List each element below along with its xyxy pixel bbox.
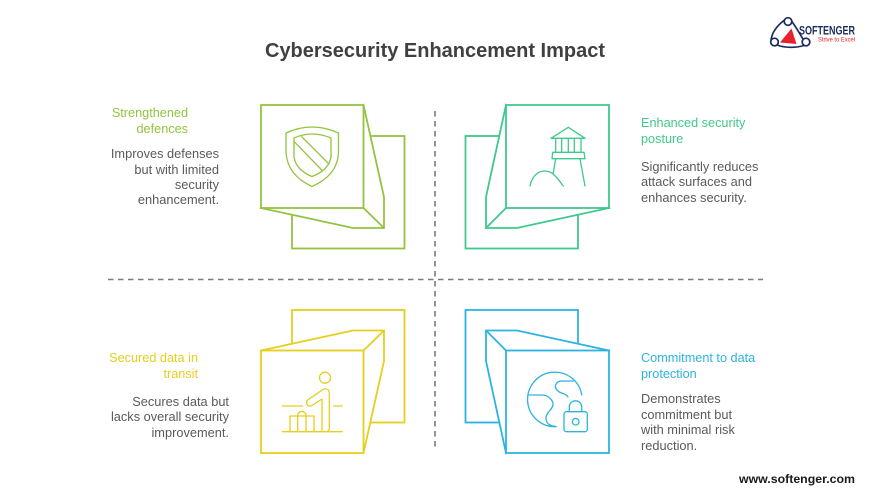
icon: shield (286, 127, 338, 186)
text block: strengthened defences: security (175, 177, 220, 192)
horizontal dashed divider (108, 278, 763, 280)
text block: enhanced security posture: enhances security. (641, 190, 747, 205)
text block: commitment to data protection: commitment but (641, 407, 732, 422)
text block: commitment to data protection: Demonstrates (641, 391, 721, 406)
text block: secured data in transit: Secures data but (132, 394, 229, 409)
text block: strengthened defences: defences (136, 122, 188, 136)
text block: secured data in transit: transit (163, 367, 198, 381)
text block: secured data in transit (109, 351, 230, 440)
text block: commitment to data protection: with minimal risk (640, 422, 735, 437)
text block: commitment to data protection: reduction. (641, 438, 697, 453)
text block: strengthened defences: Improves defenses (111, 146, 219, 161)
text block: commitment to data protection (640, 351, 756, 453)
text block: commitment to data protection: Commitment to data (641, 351, 756, 365)
text block: commitment to data protection: protection (641, 367, 697, 381)
vertical dashed divider (434, 111, 436, 450)
text block: enhanced security posture: Enhanced security (641, 116, 746, 130)
text block: strengthened defences: Strengthened (112, 106, 188, 120)
text block: strengthened defences (111, 106, 220, 207)
panel: secured data in transit graphic (261, 310, 404, 453)
logo: Softenger: Strive to Excel (818, 37, 855, 44)
website url: www.softenger.com (738, 472, 855, 486)
text block: enhanced security posture: attack surfaces and (641, 174, 752, 189)
text block: enhanced security posture (641, 116, 758, 205)
text block: enhanced security posture: posture (641, 132, 683, 146)
text block: enhanced security posture: Significantly reduces (641, 159, 758, 174)
logo: Softenger: SOFTENGER (799, 24, 855, 38)
text block: secured data in transit: improvement. (151, 425, 229, 440)
logo: Softenger (771, 18, 855, 47)
panel: strengthened defences graphic (261, 105, 404, 248)
text block: strengthened defences: enhancement. (138, 192, 219, 207)
panel: enhanced security posture graphic (466, 105, 609, 248)
icon: traveller with luggage (282, 372, 342, 432)
title: Cybersecurity Enhancement Impact (265, 39, 605, 62)
text block: secured data in transit: lacks overall security (111, 409, 230, 424)
panel: commitment to data protection graphic (466, 310, 609, 453)
icon: lighthouse (530, 127, 585, 186)
icon: globe with padlock (528, 372, 587, 432)
text block: strengthened defences: but with limited (134, 162, 219, 177)
text block: secured data in transit: Secured data in (109, 351, 198, 365)
